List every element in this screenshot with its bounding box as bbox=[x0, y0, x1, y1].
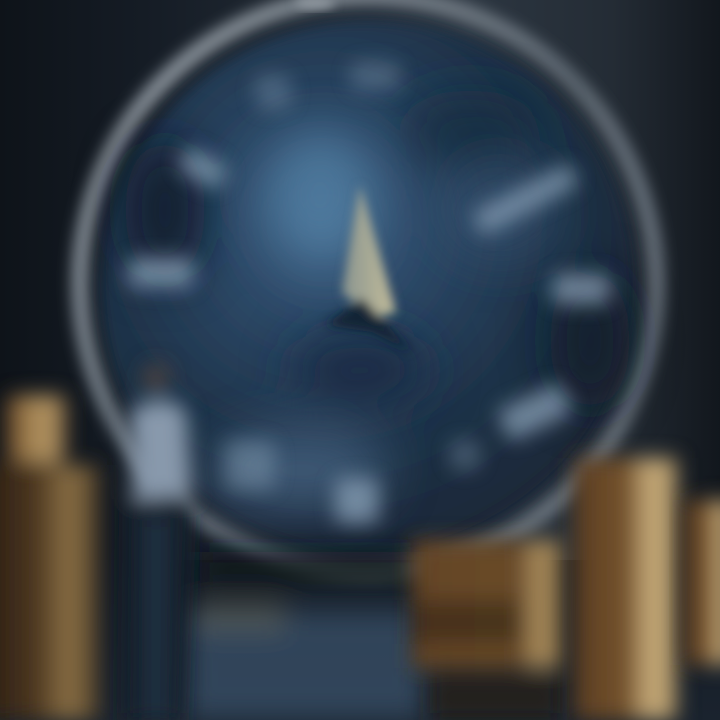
coin stack centre right bbox=[412, 540, 562, 720]
clock outer ring bbox=[80, 0, 656, 572]
person trousers bbox=[124, 495, 190, 720]
person head bbox=[142, 363, 170, 393]
person shirt bbox=[130, 400, 192, 505]
coin stack far right bbox=[684, 500, 720, 665]
clock bbox=[80, 0, 656, 572]
floor reflection bbox=[185, 552, 425, 720]
person bbox=[124, 363, 192, 720]
coin stack left bbox=[0, 395, 100, 720]
clock hands bbox=[325, 185, 412, 352]
top ring loop bbox=[295, 0, 335, 9]
clock face bbox=[100, 20, 636, 556]
clock numerals bbox=[128, 62, 610, 524]
face highlights bbox=[125, 90, 630, 510]
coin stack tall right bbox=[574, 458, 678, 720]
